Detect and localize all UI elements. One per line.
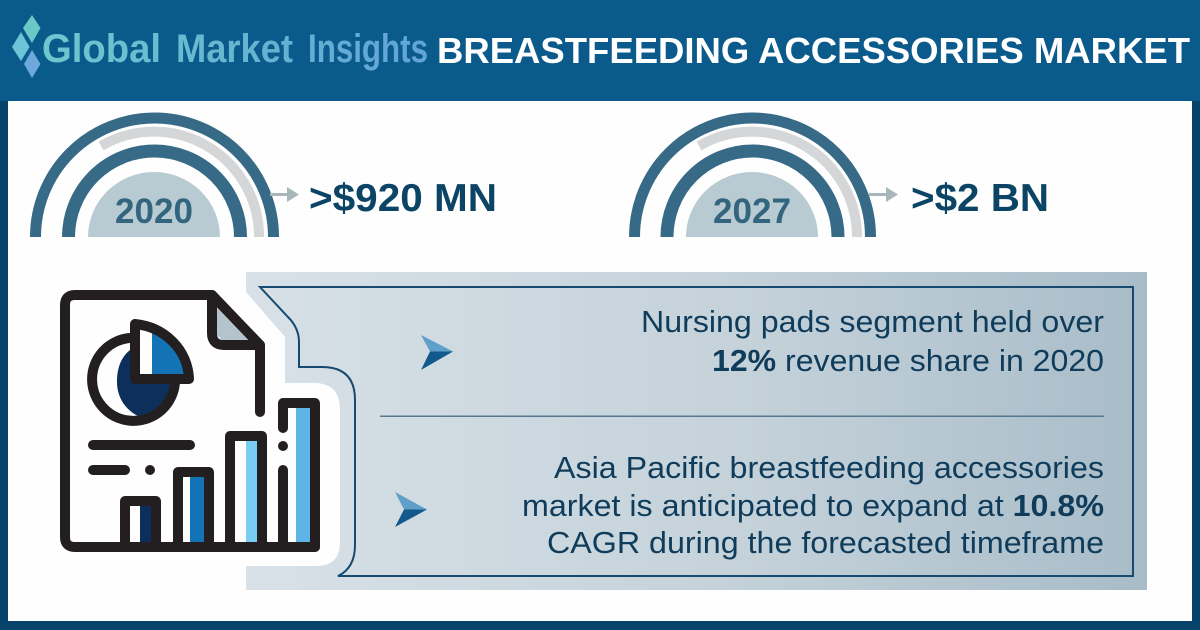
page fold fill [217, 308, 248, 340]
finding: nursing pads [641, 304, 1104, 378]
arrow: 2020 to value [270, 187, 299, 202]
year label 2027: 2027 [713, 192, 791, 231]
icon: bullet arrow 2 [395, 492, 427, 527]
finding: asia pacific: Asia Pacific breastfeeding accessories [554, 450, 1104, 485]
header band [0, 0, 1200, 101]
finding: asia pacific: CAGR during the forecasted timeframe [547, 525, 1104, 560]
finding: asia pacific: market is anticipated to expand at 10.8% [522, 488, 1104, 523]
bar fills [140, 407, 311, 543]
divider [380, 416, 1104, 417]
logo wordmark: Market [176, 27, 293, 71]
title: BREASTFEEDING ACCESSORIES MARKET [437, 30, 1190, 71]
logo wordmark [42, 27, 428, 71]
finding: asia pacific [522, 450, 1104, 560]
pie chart fills [117, 329, 184, 416]
icon: logo diamonds [12, 15, 40, 78]
logo wordmark: Global [42, 27, 161, 71]
gauge: 2027 [634, 118, 870, 237]
icon: bullet arrow 1 [421, 335, 453, 370]
icon: report document with charts [65, 295, 315, 547]
panel: key findings [246, 272, 1147, 590]
finding: nursing pads: Nursing pads segment held over [641, 304, 1104, 339]
dark line work [65, 295, 315, 547]
arrow: 2027 to value [869, 187, 898, 202]
panel inner outline [260, 287, 1133, 576]
dots [145, 465, 155, 475]
year label 2020: 2020 [115, 192, 193, 231]
logo wordmark: Insights [308, 27, 428, 71]
gauge: 2020 [36, 118, 274, 237]
finding: nursing pads: 12% revenue share in 2020 [712, 343, 1104, 378]
value: 2020 market size: >$920 MN [309, 177, 497, 220]
value: 2027 market size: >$2 BN [911, 177, 1049, 220]
